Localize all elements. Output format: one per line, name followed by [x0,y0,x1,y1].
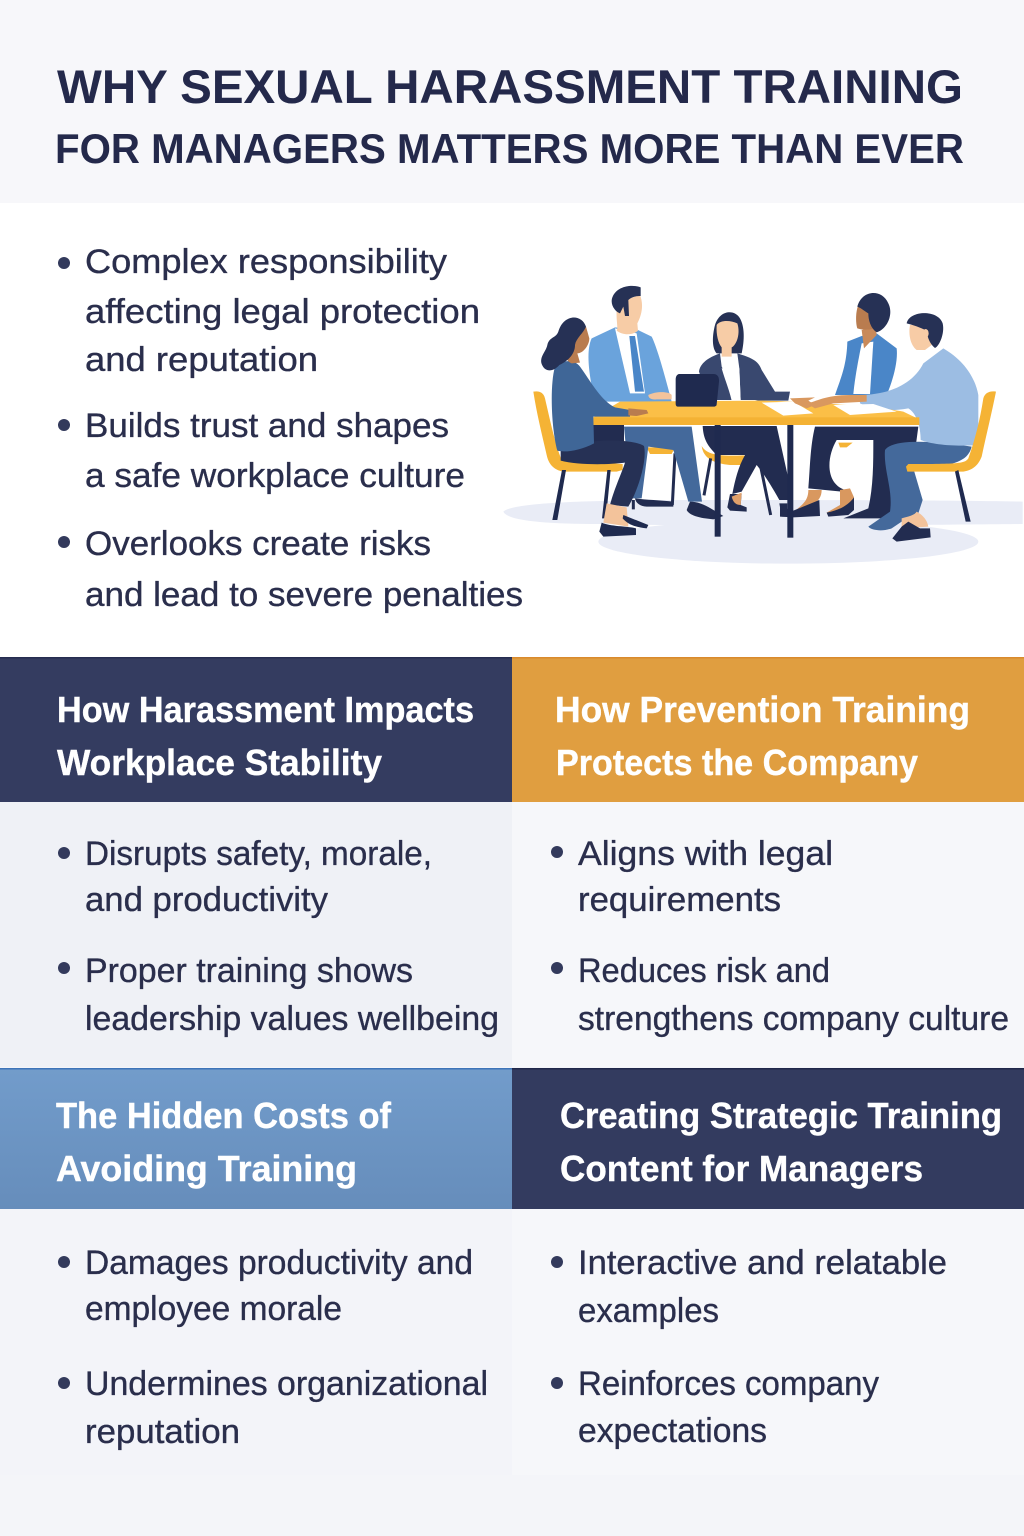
body list [0,1209,512,1475]
floor shadows [503,500,1023,564]
laptop [676,374,719,407]
panel: The Hidden Costs of Avoiding Training [0,1068,512,1475]
title: WHY SEXUAL HARASSMENT TRAINING [57,60,963,113]
person: woman in navy blazer at centre [699,312,790,517]
header: How Harassment Impacts [57,689,474,730]
panel: How Prevention Training Protects the Company [512,657,1024,1067]
header: How Prevention Training [555,689,970,730]
intro bullet list: Complex responsibility [85,243,447,281]
body list [512,1209,1024,1475]
body list [512,802,1024,1067]
body list: Proper training shows [85,952,413,990]
person: woman with ponytail on the left [541,317,648,537]
person: man in light blue suit [588,286,723,519]
header [512,657,1024,802]
person: woman in blue blazer on the right [780,293,918,518]
body list: examples [578,1292,719,1330]
panel: How Harassment Impacts Workplace Stability [0,657,512,1067]
body list: expectations [578,1412,767,1450]
header: Workplace Stability [57,742,382,783]
body list: leadership values wellbeing [85,1000,499,1038]
table [593,374,919,538]
header [512,1068,1024,1209]
papers on table [762,402,813,416]
panel: introduction [0,203,1024,657]
title [55,60,964,172]
right chair [906,391,996,522]
intro bullet list [58,243,523,614]
body list: requirements [578,881,781,919]
body list: employee morale [85,1290,342,1328]
body list: strengthens company culture [578,1000,1009,1038]
body list: reputation [85,1413,240,1451]
intro bullet list: a safe workplace culture [85,457,465,495]
intro bullet list: affecting legal protection [85,293,480,331]
back chairs [647,443,853,465]
intro bullet list: Overlooks create risks [85,525,431,563]
body list: Damages productivity and [85,1244,473,1282]
header: Protects the Company [556,742,918,783]
intro bullet list: and lead to severe penalties [85,576,523,614]
header [0,657,512,802]
body list: Reduces risk and [578,952,830,990]
left chair [533,391,623,520]
body list: Undermines organizational [85,1365,488,1403]
header: The Hidden Costs of [56,1095,392,1136]
body list: Aligns with legal [578,835,833,873]
title: FOR MANAGERS MATTERS MORE THAN EVER [55,125,964,172]
title band [0,0,1024,203]
body list: and productivity [85,881,328,919]
body list: Disrupts safety, morale, [85,835,432,873]
body list: Reinforces company [578,1365,879,1403]
header: Creating Strategic Training [560,1095,1002,1136]
header [0,1068,512,1209]
intro bullet list: Builds trust and shapes [85,407,449,445]
body list [0,802,512,1067]
header: Content for Managers [560,1148,923,1189]
body list: Interactive and relatable [578,1244,947,1282]
illustration: team meeting around a table [503,286,1023,564]
intro bullet list: and reputation [85,341,318,379]
person: man in pale blue sweater on the right [859,313,978,542]
header: Avoiding Training [56,1148,357,1189]
hands on table [790,395,867,408]
panel: Creating Strategic Training Content for Managers [512,1068,1024,1475]
